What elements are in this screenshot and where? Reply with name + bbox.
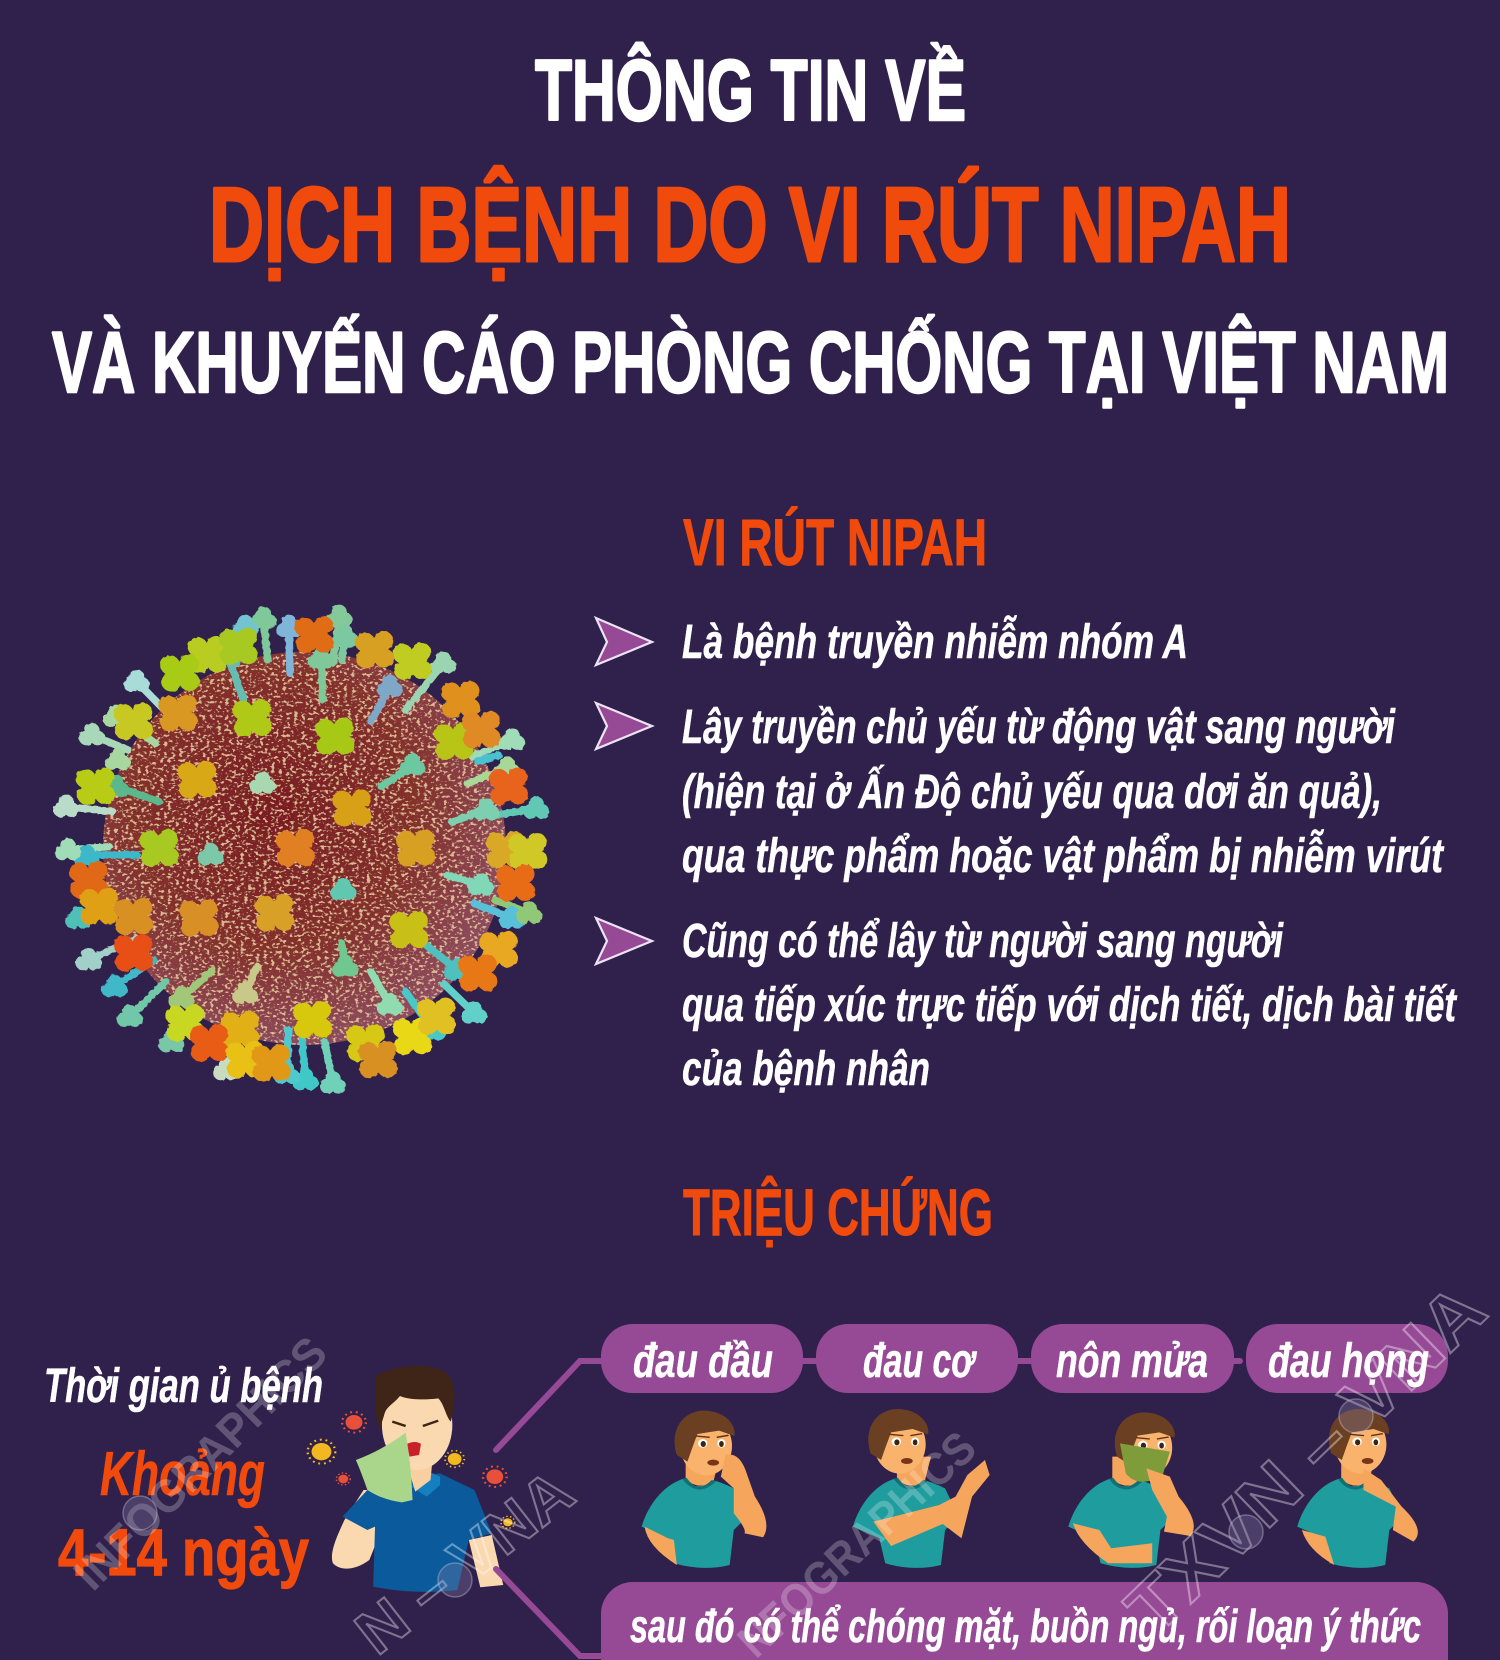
- connector lines: [496, 1361, 1240, 1656]
- watermark globes: [123, 1399, 1373, 1597]
- pill: đau họng: [1246, 1324, 1448, 1393]
- incubation days: 4-14 ngày: [58, 1515, 309, 1589]
- watermark: infographics middle: NFOGRAPHICS: [727, 1421, 986, 1660]
- virus spikes: [53, 605, 549, 1094]
- bullet text: [682, 915, 1457, 1096]
- title line 1: THÔNG TIN VỀ: [535, 43, 966, 139]
- bullet 2: [596, 701, 1444, 883]
- pill: đau họng: đau họng: [1268, 1335, 1429, 1388]
- icon: arrow: [596, 618, 652, 665]
- symptom pills: [601, 1324, 1448, 1393]
- watermark: infographics left: INFOGRAPHICS: [63, 1326, 337, 1600]
- bullet 1: [596, 615, 1188, 669]
- icon: arrow: [596, 918, 652, 964]
- bullet 3: [596, 915, 1457, 1096]
- pill: đau cơ: [816, 1324, 1018, 1393]
- icon: man vomiting: [1068, 1412, 1194, 1568]
- title: [52, 43, 1449, 411]
- heading: triệu chứng: TRIỆU CHỨNG: [683, 1175, 993, 1249]
- icon: man with headache: [642, 1411, 766, 1568]
- incubation period: [44, 1360, 323, 1589]
- pill: nôn mửa: nôn mửa: [1056, 1335, 1208, 1388]
- icon: sneezing man: [308, 1366, 515, 1592]
- watermark: ttxvn right: TXVN – VNA: [1111, 1269, 1500, 1650]
- pill: đau đầu: đau đầu: [633, 1335, 773, 1388]
- incubation label: Thời gian ủ bệnh: [44, 1360, 323, 1413]
- bullet text: [682, 701, 1444, 883]
- bullet text: Là bệnh truyền nhiễm nhóm A: [682, 615, 1188, 669]
- icon: nipah virus illustration: [53, 605, 549, 1094]
- heading: vi rút nipah: VI RÚT NIPAH: [683, 505, 987, 579]
- pill: đau cơ: đau cơ: [863, 1335, 977, 1388]
- pill: nôn mửa: [1031, 1324, 1234, 1393]
- pill: đau đầu: [601, 1324, 803, 1393]
- icon: arrow: [596, 703, 652, 749]
- virus body: [103, 652, 506, 1045]
- bullet text: của bệnh nhân: [682, 1043, 930, 1096]
- bottom pill: [601, 1582, 1448, 1660]
- incubation khoảng: Khoảng: [100, 1440, 265, 1509]
- icon: man with sore throat: [1297, 1409, 1418, 1568]
- icon: man with muscle pain: [853, 1409, 990, 1568]
